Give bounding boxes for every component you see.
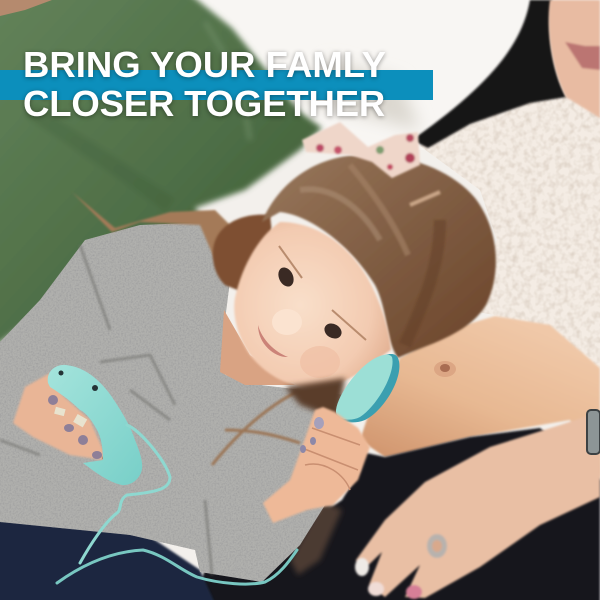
woman's hand with ring xyxy=(355,412,600,599)
navy jeans xyxy=(0,520,218,600)
woman's skin xyxy=(549,0,600,118)
girl's hair xyxy=(262,155,496,358)
girl's face xyxy=(234,222,391,388)
toy phone handset xyxy=(48,365,142,485)
man's green shirt xyxy=(0,0,322,350)
headline xyxy=(22,44,387,124)
girl's left hand xyxy=(13,373,103,460)
girl's neck xyxy=(220,310,295,385)
headline: CLOSER TOGETHER xyxy=(23,83,385,124)
man's skin at neck xyxy=(0,0,52,16)
floral hair bow xyxy=(302,122,420,178)
pregnant belly xyxy=(360,316,600,480)
headline: BRING YOUR FAMLY xyxy=(23,44,386,85)
nails, left hand xyxy=(48,395,102,459)
smartwatch xyxy=(587,410,600,454)
sweater folds xyxy=(0,245,212,575)
teal headline banner xyxy=(0,70,433,100)
dark hair behind phone xyxy=(285,378,345,420)
toy phone earpiece xyxy=(336,354,399,422)
grey sweater xyxy=(0,222,345,582)
fingers and nails, right hand xyxy=(300,417,360,490)
black pants xyxy=(190,428,600,600)
girl's hair side bunch xyxy=(213,215,275,295)
belly button xyxy=(434,361,456,377)
brown fabric shadow below arm xyxy=(290,500,342,575)
girl's right hand and arm xyxy=(263,407,370,523)
hair strands over sweater xyxy=(212,390,300,465)
woman's lace top xyxy=(420,95,600,368)
eyes, nose and mouth xyxy=(258,246,366,378)
dark gap inside phone handle xyxy=(88,425,104,460)
toy phone cable xyxy=(57,425,297,584)
hair highlights xyxy=(300,165,440,345)
woman's dark hair xyxy=(412,0,566,148)
girl's flyaway hair xyxy=(72,192,230,260)
